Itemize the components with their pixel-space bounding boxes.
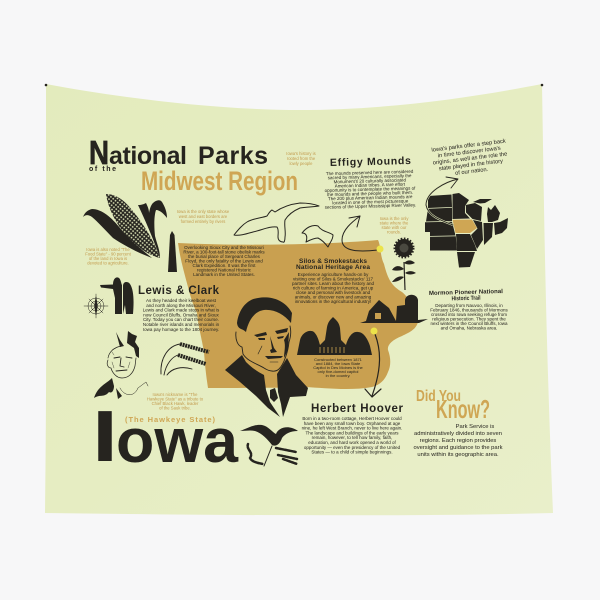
icon: Herbert Hoover portrait [225,297,308,417]
note: food state: Food State" - 90 percent [85,252,132,256]
text: Effigy Mounds: The 200 plus American Indian mounds are [328,194,413,201]
title: of the [89,166,116,173]
heading: Did You Know: Know? [436,394,490,424]
note: food state [85,247,132,266]
tie [270,388,278,402]
subtitle: The Hawkeye State: (The Hawkeye State) [125,415,216,424]
note: Hawkeye nickname: Hawkeye State" as a tribute to [147,396,204,402]
heading: Mormon Pioneer: Historic Trail [452,296,481,302]
text: Silos & Smokestacks: partner sites. Learn about the history and [292,281,375,286]
text: Silos & Smokestacks: close and personal with livestock and [296,290,371,295]
text: Lewis & Clark [143,298,220,332]
text: capitol caption: Constructed between 1871 [314,357,363,362]
WI [466,203,482,221]
heading: Did You Know [416,388,490,424]
text: Herbert Hoover: States — to a child of simple beginnings. [311,450,393,455]
note: state borders: formed entirely by rivers [181,219,225,224]
title: Midwest Region [141,166,298,196]
text: Effigy Mounds: The mounds preserved here are considered [326,169,414,176]
text: Overlooking Sioux City: registered National Historic [197,268,252,272]
outline: effigy bird [234,203,319,242]
text: Silos & Smokestacks [292,272,375,304]
text: Silos & Smokestacks: innovations in the agricultural industry! [295,299,371,304]
IA [452,220,477,233]
text: capitol caption: in the country. [326,373,350,378]
heading: Silos & Smokestacks [296,258,370,271]
note: rivers: rounds. [387,230,401,234]
heading: Mormon Pioneer [429,289,503,303]
text: Overlooking Sioux City [183,245,265,277]
note: rivers: state where the [380,220,409,226]
outline: effigy bear [302,225,333,247]
text: Mormon Pioneer: next winters in the Council Bluffs, Iowa [431,321,508,326]
arrow: from mounds marker [342,216,378,251]
text: Herbert Hoover: opportunity — even the presidency of the United [304,445,401,450]
title: ational [109,142,187,170]
note: food state: of the land in Iowa is [89,256,127,261]
note: Hawkeye nickname: Chief Black Hawk, leader [152,401,199,406]
text: Lewis & Clark: now Council Bluffs, Omaha and Sioux [143,312,219,317]
text: Lewis & Clark: Iowa pay homage to the 1804 journey. [143,327,219,332]
text: Effigy Mounds: opportunity is to contemplate the meanings of [325,186,416,193]
icon: barn and silo [360,295,428,323]
MN [452,193,470,219]
text: Herbert Hoover: have been any small town boy. Orphaned at age [304,421,401,426]
text: Effigy Mounds: sacred by many Americans, especially the [328,173,412,180]
UP [473,199,492,204]
text: Did You Know: regions. Each region provides [420,438,496,444]
note: lowly people: rooted from the [287,156,316,161]
OH [494,218,508,235]
text: Overlooking Sioux City: River, a 100-foot-tall stone obelisk marks [183,250,265,254]
IL [471,220,483,249]
jacket left [225,355,280,417]
heading: Lewis & Clark: Lewis & Clark [138,285,220,297]
heading: Herbert Hoover: Herbert Hoover [311,403,404,415]
icon: Chief Black Hawk portrait [94,331,148,399]
note: state borders: Iowa is the only state whose [177,209,230,214]
text: Lewis & Clark: Lewis and Clark made stops in what is [143,308,220,313]
text: Lewis & Clark: Notable river islands and memorials in [143,322,220,327]
heading: Did You Know: Did You [416,388,461,405]
text: Overlooking Sioux City: Clark Expedition. It was the first [192,263,256,268]
note: rivers [380,216,409,234]
hair [237,297,292,332]
text: Herbert Hoover [302,416,402,455]
text: Effigy Mounds: sections of the Upper Mississippi River Valley. [325,202,416,210]
title: Parks [198,142,268,170]
text: Effigy Mounds [324,169,417,210]
SD [426,208,452,222]
text: Lewis & Clark: City. Today you can chart their course. [143,317,219,322]
note: lowly people: lowly people [289,161,313,166]
text: Lewis & Clark: and north along the Missouri River, [146,303,216,308]
text: Overlooking Sioux City: Overlooking Sioux City and the Missouri [184,245,264,250]
text: capitol caption: and 1884, the Iowa State [316,361,361,366]
midwest map [425,193,508,268]
text: Iowa's parks intro [431,139,509,179]
text: Did You Know: oversight and guidance to the park [414,445,503,451]
jacket right [277,358,308,417]
heading: Mormon Pioneer: Mormon Pioneer National [429,289,503,297]
text: capitol caption: only five-domed capitol [318,369,359,374]
text: Silos & Smokestacks: Experience agriculture hands-on by [298,272,369,277]
text: Herbert Hoover: The landscape and buildings of the early years [305,430,399,435]
text: Iowa's parks intro: of our nation. [455,167,489,177]
text: Did You Know: Park Service is [456,424,494,430]
text: Mormon Pioneer [430,303,509,330]
icon: capitol building [297,317,372,355]
title: Iowa: owa [116,407,239,476]
text: Lewis & Clark: As they headed their keelboat west [146,298,217,303]
text: capitol caption [313,357,364,378]
AR [457,252,475,268]
text: Effigy Mounds: the mounds and the people who built them. [327,190,413,197]
icon: eagle and banner [240,425,298,466]
note: food state: devoted to agriculture. [87,260,129,266]
title [89,134,298,196]
text: Mormon Pioneer: and Omaha, Nebraska area. [441,326,497,330]
note: food state: Iowa is also noted "The [86,247,130,252]
text: Iowa's parks intro: state played in the history [439,159,503,172]
icon: wheat [161,344,209,375]
heading: Silos & Smokestacks: National Heritage Area [296,264,370,271]
note: Hawkeye nickname: of the Sauk tribe. [159,406,191,410]
title: N [89,134,109,171]
text: Mormon Pioneer: Departing from Nauvoo, Illinois, in [435,303,503,308]
marker and arrow: Herbert Hoover [365,328,381,397]
text: Iowa's parks intro: origins, as well as the role the [433,151,508,167]
text: Effigy Mounds: located in one of the most picturesque [332,198,409,205]
icon: Lewis and Clark silhouettes [100,277,134,314]
face [236,326,291,371]
text: Mormon Pioneer: crossed into Iowa seeking refuge from [431,312,507,317]
heading: Silos & Smokestacks: Silos & Smokestacks [299,258,367,265]
MO [456,234,477,251]
icon: corn [83,194,167,258]
note: Hawkeye nickname [147,392,204,410]
text: Silos & Smokestacks: visiting one of Silos & Smokestacks' 117 [293,276,374,282]
hanging pins [45,84,543,86]
ND [428,194,452,208]
text: Effigy Mounds: American Indian tribes. A rare effort [335,182,406,189]
note: state borders [177,209,230,224]
marker: yellow dot effigy mounds [376,246,384,252]
note: rivers: Iowa is the only [380,216,409,221]
text: Overlooking Sioux City: the burial place of Sergeant Charles [188,254,261,259]
MI [487,205,500,222]
text: Herbert Hoover: education, and hard work opened a world of [308,440,397,445]
KS [430,236,457,250]
icon: sunflower [392,239,416,290]
text: Did You Know [414,424,503,458]
text: Did You Know: units within its geographic area. [417,452,499,458]
heading: Effigy Mounds: Effigy Mounds [330,155,411,169]
text: Herbert Hoover: Born in a two-room cottage, Herbert Hoover could [302,416,402,421]
text: Did You Know: administratively divided into seven [414,431,502,437]
text: Silos & Smokestacks: rich culture of farming in America, get up [293,286,374,290]
icon: compass rose [84,294,108,318]
note: lowly people [286,151,316,166]
IN [484,223,493,245]
text: capitol caption: Capitol in Des Moines is the [313,365,364,370]
text: Iowa's parks intro: in time to discover Iowa's [438,146,501,159]
text: Herbert Hoover: remain, however, to tell how family, faith, [312,435,392,440]
title: Iowa: I [92,397,118,477]
note: Hawkeye nickname: Iowa's nickname is "The [153,392,198,397]
text: Silos & Smokestacks: animals, or discover new and amazing [295,294,372,300]
text: Overlooking Sioux City: Floyd, the only fatality of the Lewis and [185,258,263,264]
Iowa state map shape [178,240,418,389]
NE [425,222,456,236]
text: Iowa's parks intro: Iowa's parks offer a step back [431,139,506,154]
note: rivers: state with our [382,225,407,230]
text: Effigy Mounds: Monument's 20 culturally associated [334,177,407,184]
text: Herbert Hoover: nine, he left West Branch, never to live here again. [302,426,402,431]
text: Mormon Pioneer: religious persecution. They spent the [432,316,506,322]
text: Overlooking Sioux City: Landmark in the United States. [193,272,255,277]
note: lowly people: Iowa's history is [286,151,316,156]
tapestry background [45,84,553,515]
arrow: map to intro [426,177,458,225]
icon: obelisk monument [168,231,177,272]
note: state borders: west and east borders are [179,214,228,219]
text: Mormon Pioneer: February 1846, thousands of Mormons [430,308,509,312]
